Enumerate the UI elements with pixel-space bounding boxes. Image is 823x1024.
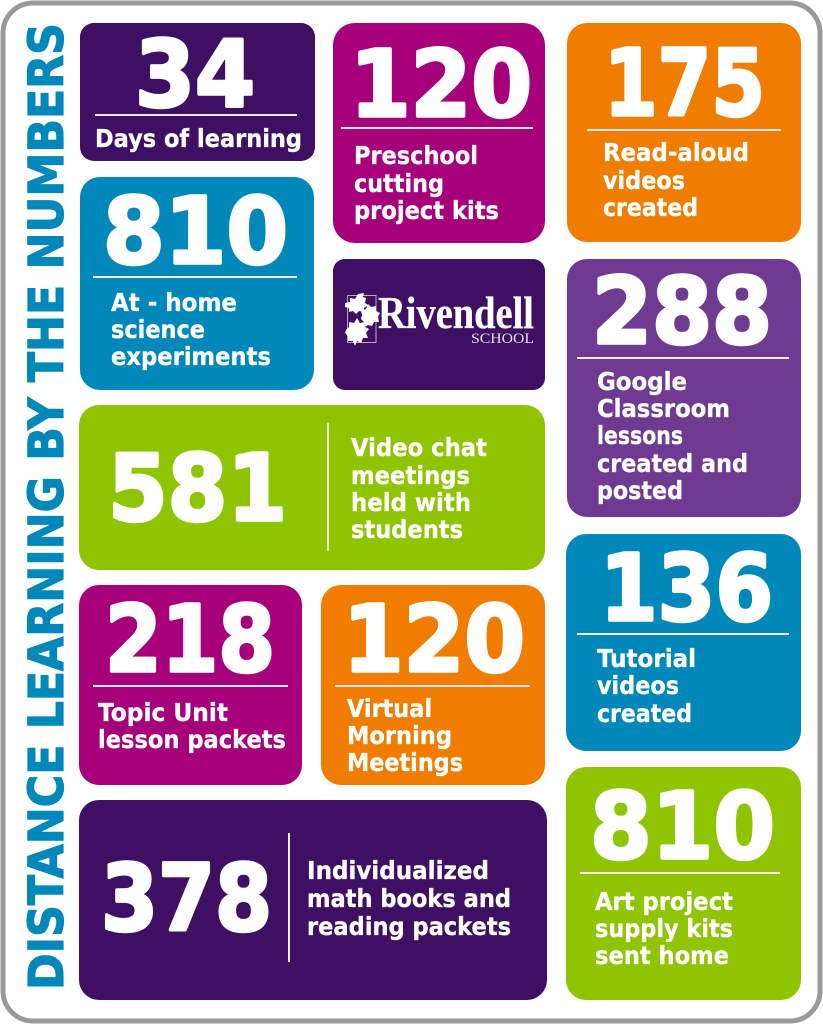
icon: maple leaves (345, 293, 380, 346)
panel: 378 math books and reading packets: Individualized (307, 856, 489, 885)
panel: 175 read-aloud videos: Read-aloud (603, 138, 749, 167)
panel: 120 preschool kits: 120 (350, 31, 532, 138)
panel: 378 math books and reading packets: 378 (101, 845, 272, 952)
panel: 810 science experiments: experiments (111, 342, 271, 371)
panel: 810 art project kits: Art project (595, 887, 733, 916)
panel: 120 virtual morning meetings: Meetings (347, 748, 463, 777)
panel: 136 tutorial videos (566, 534, 801, 751)
panel: 810 science experiments: 810 (103, 178, 288, 285)
panel: 810 science experiments (80, 177, 314, 390)
panel: Rivendell School logo (333, 259, 545, 390)
panel: 810 art project kits (566, 767, 801, 1000)
panel: 175 read-aloud videos (567, 23, 801, 242)
panel: 120 virtual morning meetings: 120 (343, 586, 525, 693)
panel: 288 Google Classroom lessons: Classroom (597, 394, 730, 423)
panel: 136 tutorial videos: Tutorial (597, 644, 696, 673)
panel: 581 video chat meetings: meetings (351, 461, 470, 490)
panel: 136 tutorial videos: created (597, 699, 692, 728)
panel: 581 video chat meetings: Video chat (351, 433, 487, 462)
panel: 120 preschool kits: Preschool (354, 141, 478, 170)
panel: 120 virtual morning meetings: Virtual (347, 694, 432, 723)
panel: 120 preschool kits: project kits (354, 196, 499, 225)
panel: 288 Google Classroom lessons: posted (597, 476, 683, 505)
panel: 378 math books and reading packets (79, 800, 547, 1000)
panel: 218 topic unit packets: Topic Unit (98, 698, 228, 727)
panel: 288 Google Classroom lessons: created and (597, 449, 748, 478)
panel: Rivendell School logo: SCHOOL (471, 331, 534, 347)
panel: 810 science experiments: At - home (111, 288, 237, 317)
panel: 34 days of learning: Days of learning (95, 124, 302, 153)
panel: 218 topic unit packets: 218 (105, 586, 275, 693)
panel: Rivendell School logo: Rivendell (378, 287, 534, 338)
panel: 581 video chat meetings (79, 405, 545, 570)
panel: 581 video chat meetings: 581 (108, 435, 287, 542)
panel: 120 preschool kits (333, 23, 545, 243)
panel: 120 virtual morning meetings: Morning (347, 721, 452, 750)
panel: 218 topic unit packets (79, 585, 302, 785)
panel: 378 math books and reading packets: math books and (307, 884, 511, 913)
panel: 810 art project kits: 810 (590, 773, 775, 880)
panel: 34 days of learning: 34 (135, 21, 255, 128)
panel: 218 topic unit packets: lesson packets (98, 725, 286, 754)
panel: 34 days of learning (80, 21, 315, 161)
panel: 810 art project kits: sent home (595, 941, 729, 970)
panel: 581 video chat meetings: held with (351, 488, 471, 517)
panel: 175 read-aloud videos: created (603, 193, 698, 222)
panel: 810 science experiments: science (111, 315, 205, 344)
panel: 175 read-aloud videos: videos (603, 166, 685, 195)
panel: 378 math books and reading packets: reading packets (307, 912, 511, 941)
panel: 175 read-aloud videos: 175 (604, 30, 765, 137)
panel: 288 Google Classroom lessons: Google (597, 367, 687, 396)
panel: 120 virtual morning meetings (321, 585, 545, 785)
panel: 810 art project kits: supply kits (595, 914, 733, 943)
panel: 581 video chat meetings: students (351, 515, 463, 544)
panel: 136 tutorial videos: 136 (600, 535, 773, 642)
panel: 288 Google Classroom lessons: 288 (592, 258, 772, 365)
panel: 288 Google Classroom lessons: lessons (597, 421, 683, 450)
panel: 136 tutorial videos: videos (597, 671, 679, 700)
panel: 288 Google Classroom lessons (567, 258, 801, 517)
panel: 120 preschool kits: cutting (354, 169, 444, 198)
